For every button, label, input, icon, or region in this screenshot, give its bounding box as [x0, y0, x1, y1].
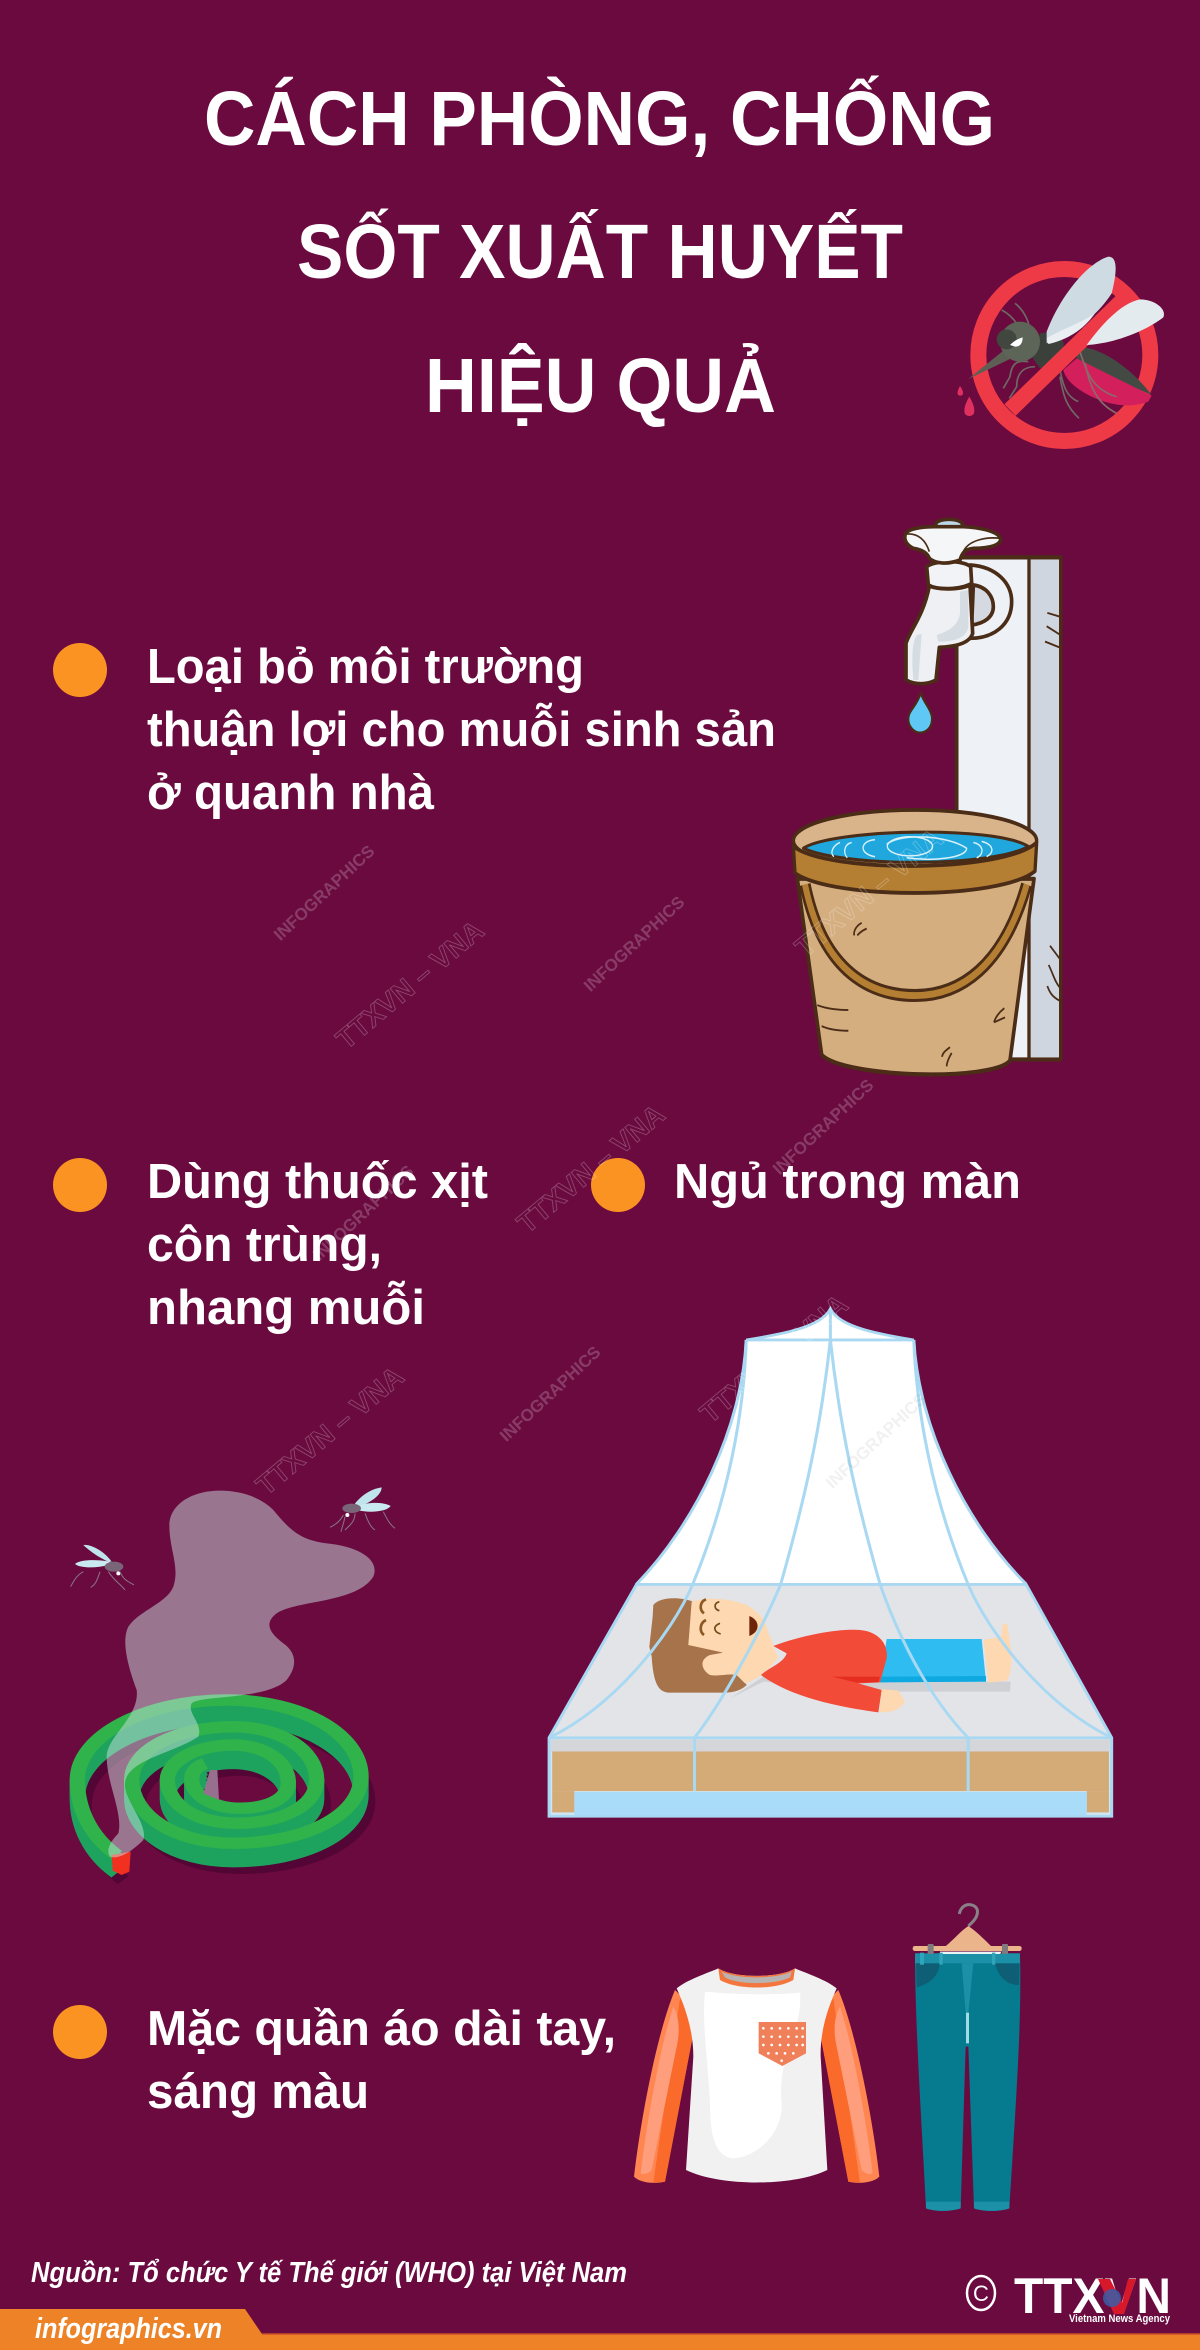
- footer bar with site name: [0, 2309, 1200, 2350]
- text: remove breeding sites: Loại bỏ môi trường: [147, 640, 584, 694]
- footer bar with site name: infographics.vn: [35, 2313, 222, 2345]
- watermarks: TTXVN – VNA: [250, 1360, 410, 1501]
- watermarks: TTXVN – VNA: [789, 822, 949, 963]
- icon: right mosquito: [330, 1487, 395, 1532]
- text: insect spray and coils: côn trùng,: [147, 1218, 382, 1272]
- text: insect spray and coils: Dùng thuốc xịt: [147, 1155, 488, 1209]
- icon: faucet and water bucket: [793, 519, 1061, 1074]
- icon: mosquito coil with smoke: [71, 1487, 395, 1880]
- watermarks: INFOGRAPHICS: [822, 1390, 930, 1492]
- title: [204, 75, 995, 429]
- watermarks: INFOGRAPHICS: [270, 842, 378, 944]
- source note: Nguồn: Tổ chức Y tế Thế giới (WHO) tại Việt Nam: [31, 2257, 627, 2289]
- text: remove breeding sites: thuận lợi cho muỗi sinh sản: [147, 703, 776, 757]
- text: wear long clothes: sáng màu: [147, 2065, 369, 2119]
- text: wear long clothes: [147, 2002, 616, 2119]
- logo: TTXVN: C: [973, 2281, 989, 2306]
- watermarks: TTXVN – VNA: [511, 1098, 671, 1239]
- bullet: insect spray: [53, 1158, 107, 1212]
- text: insect spray and coils: [147, 1155, 488, 1335]
- icon: no mosquito sign: [958, 257, 1164, 441]
- person sleeping: [649, 1598, 1011, 1712]
- watermarks: TTXVN – VNA: [330, 914, 490, 1055]
- icon: bed with mosquito net and sleeping person: [549, 1309, 1112, 1816]
- icon: long sleeve shirt: [634, 1968, 879, 2183]
- title: SỐT XUẤT HUYẾT: [297, 207, 903, 295]
- watermarks: INFOGRAPHICS: [496, 1343, 604, 1445]
- text: wear long clothes: Mặc quần áo dài tay,: [147, 2002, 616, 2056]
- watermarks: INFOGRAPHICS: [580, 893, 688, 995]
- watermarks: TTXVN – VNA: [694, 1288, 854, 1429]
- text: remove breeding sites: [147, 640, 776, 820]
- text: remove breeding sites: ở quanh nhà: [147, 766, 435, 820]
- title: HIỆU QUẢ: [425, 342, 776, 429]
- icon: trousers on hanger: [913, 1905, 1022, 2211]
- icon: left mosquito: [71, 1545, 134, 1590]
- watermarks: [250, 822, 949, 1501]
- logo: TTXVN: Vietnam News Agency: [1069, 2313, 1171, 2325]
- bullet: wear long clothes: [53, 2005, 107, 2059]
- watermarks: INFOGRAPHICS: [309, 1162, 417, 1264]
- watermarks: INFOGRAPHICS: [769, 1076, 877, 1178]
- bullet: remove breeding sites: [53, 643, 107, 697]
- text: sleep under net: Ngủ trong màn: [674, 1155, 1021, 1209]
- text: insect spray and coils: nhang muỗi: [147, 1281, 425, 1335]
- logo: TTXVN: TTXVN: [1014, 2268, 1171, 2324]
- title: CÁCH PHÒNG, CHỐNG: [204, 75, 995, 162]
- bullet: sleep under net: [591, 1158, 645, 1212]
